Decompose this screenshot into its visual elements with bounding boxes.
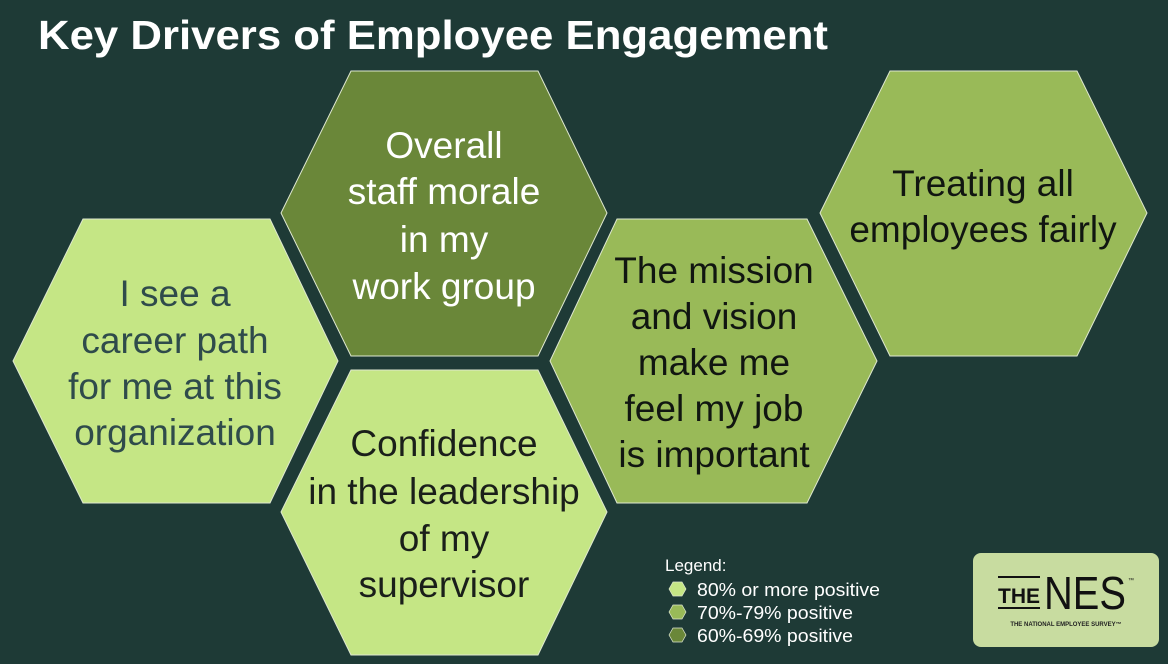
hexagon: mission and vision: The mission <box>614 250 814 291</box>
hexagon: overall staff morale: Overall <box>385 125 503 166</box>
logo: The NES: ™ <box>1128 577 1134 584</box>
hexagon: confidence in leadership <box>281 370 607 655</box>
hexagon: mission and vision <box>550 219 877 503</box>
hexagon: overall staff morale: in my <box>400 219 489 260</box>
hexagon: mission and vision: make me <box>638 342 790 383</box>
logo: The NES: NES <box>1044 567 1126 619</box>
hexagon: mission and vision: and vision <box>631 296 797 337</box>
hexagon: confidence in leadership: supervisor <box>359 564 529 605</box>
hexagon: confidence in leadership: in the leadership <box>308 471 580 512</box>
hexagon: confidence in leadership: Confidence <box>350 423 538 464</box>
hexagon: overall staff morale: work group <box>351 266 536 307</box>
legend item: 60-69%: 60%-69% positive <box>697 626 853 646</box>
hexagon: career path: for me at this <box>68 366 282 407</box>
hexagon: treating employees fairly <box>820 71 1147 356</box>
hexagon: overall staff morale: staff morale <box>348 171 540 212</box>
logo: The NES: THE <box>998 585 1040 608</box>
legend: Legend: <box>665 556 726 575</box>
title: Key Drivers of Employee Engagement <box>38 12 828 58</box>
hexagon: confidence in leadership: of my <box>399 518 490 559</box>
hexagon: treating employees fairly: employees fairly <box>849 209 1117 250</box>
logo: The NES <box>973 553 1159 647</box>
hexagon: treating employees fairly: Treating all <box>892 163 1074 204</box>
logo: The NES: THE NATIONAL EMPLOYEE SURVEY™ <box>1010 621 1122 628</box>
hexagon: overall staff morale <box>281 71 607 356</box>
hexagon: career path: I see a <box>119 273 231 314</box>
hexagon: career path: career path <box>81 320 269 361</box>
hexagon: mission and vision: is important <box>618 434 810 475</box>
legend item: 80%+: 80% or more positive <box>697 580 880 600</box>
hexagon: career path <box>13 219 338 503</box>
legend item: 70-79%: 70%-79% positive <box>697 603 853 623</box>
hexagon: career path: organization <box>74 412 276 453</box>
legend <box>665 556 880 646</box>
hexagon: mission and vision: feel my job <box>625 388 803 429</box>
